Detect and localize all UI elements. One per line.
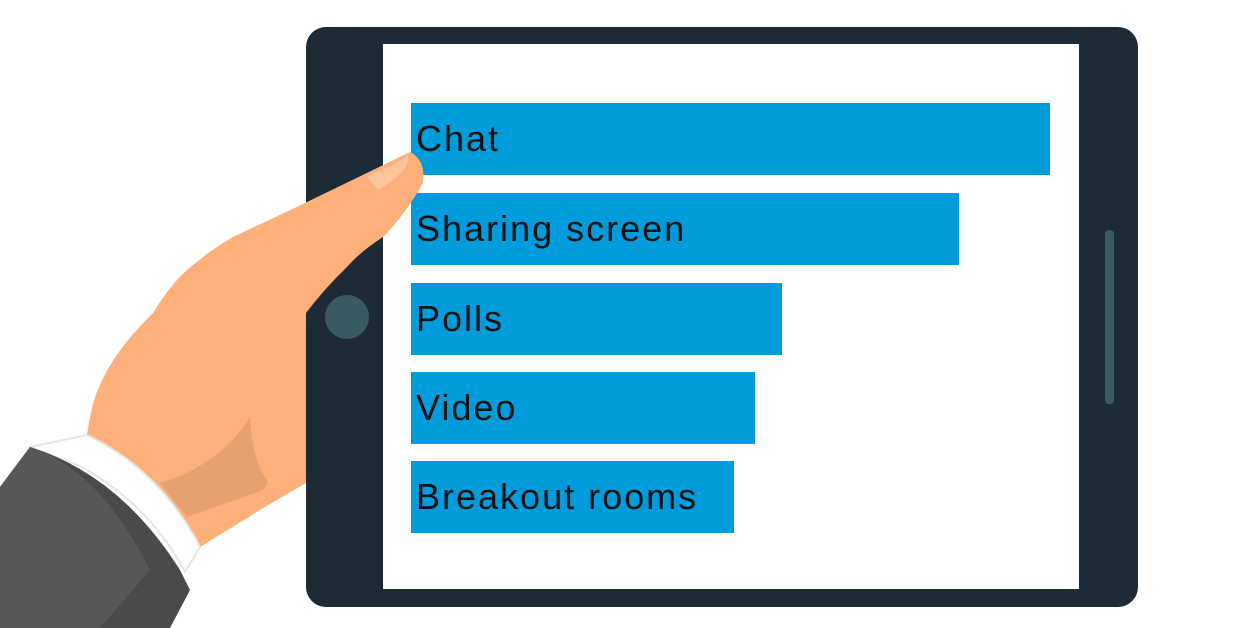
- home button: [325, 295, 369, 339]
- bar: Breakout rooms: Breakout rooms: [416, 476, 698, 517]
- bar: Sharing screen: [411, 193, 959, 265]
- bar: Chat: Chat: [416, 118, 500, 159]
- side slot: [1105, 230, 1114, 404]
- screen: [383, 44, 1079, 589]
- bar: Video: [411, 372, 755, 444]
- bar: Polls: Polls: [416, 298, 504, 339]
- sleeve: [0, 447, 190, 628]
- bar: Chat: [411, 103, 1050, 175]
- bar: Breakout rooms: [411, 461, 734, 533]
- bar: Polls: [411, 283, 782, 355]
- bar: Video: Video: [416, 387, 517, 428]
- bar: Sharing screen: Sharing screen: [416, 208, 686, 249]
- tablet: [306, 27, 1138, 607]
- cuff: [30, 435, 200, 572]
